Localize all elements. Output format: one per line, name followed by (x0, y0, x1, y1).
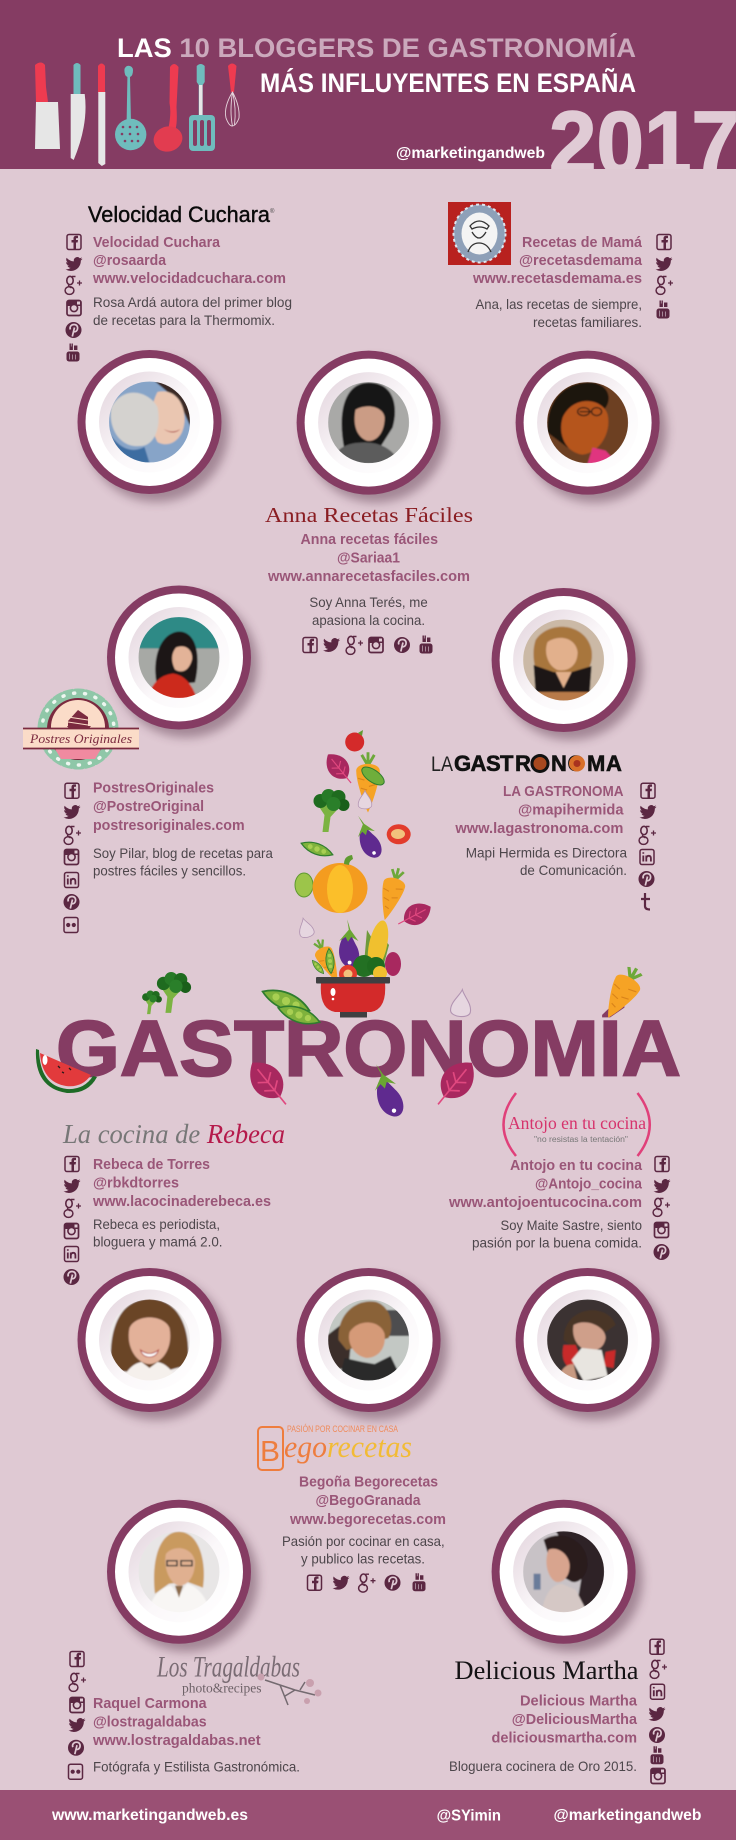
header banner (0, 0, 736, 169)
footer handle marketingandweb: @marketingandweb (554, 1807, 702, 1824)
watermelon (36, 1049, 97, 1093)
illustration: vegetables falling into bowl (295, 730, 436, 1018)
carrot (596, 962, 649, 1025)
social icons: Begoña Begorecetas (308, 1573, 426, 1592)
logo: Antojo en tu cocina: Antojo en tu cocina (508, 1113, 646, 1133)
plate portrait 6 (78, 1268, 228, 1420)
blogger: Postres Originales text: postres fáciles y sencillos. (93, 863, 246, 879)
blogger: Anna Recetas Fáciles text (267, 531, 470, 628)
footer bar (0, 1790, 736, 1840)
blogger: Antojo en tu cocina text: Antojo en tu cocina (510, 1157, 643, 1174)
logo: Anna Recetas Fáciles: Anna Recetas Fáciles (265, 503, 473, 527)
leaf (393, 898, 436, 933)
social icons: Postres Originales (64, 783, 81, 932)
logo: Los Tragaldabas: photo&recipes (182, 1682, 262, 1697)
blogger: Postres Originales text (93, 780, 273, 879)
pumpkin (295, 855, 368, 913)
logo: Begorecetas: egorecetas (284, 1429, 412, 1464)
pea pod (299, 838, 335, 860)
blogger: Velocidad Cuchara text: Velocidad Cuchara (93, 234, 221, 251)
blogger: Delicious Martha text: @DeliciousMartha (512, 1711, 638, 1728)
blogger: Begoña Begorecetas text (282, 1474, 446, 1567)
blogger: La Gastronoma text: @mapihermida (518, 802, 624, 819)
eggplant (367, 1060, 407, 1120)
social icons: Recetas de Mamá (656, 234, 673, 318)
bowl contents (309, 919, 401, 986)
plate portrait 1 (78, 350, 228, 502)
blogger: Anna Recetas Fáciles text: www.annarecetasfaciles.com (267, 568, 470, 585)
blogger: Anna Recetas Fáciles text: @Sariaa1 (337, 550, 400, 567)
blogger: Delicious Martha text: deliciousmartha.com (492, 1729, 637, 1746)
blogger: Recetas de Mamá text: @recetasdemama (519, 252, 643, 269)
blogger: Delicious Martha text: Delicious Martha (520, 1692, 638, 1709)
logo: Begorecetas: B (260, 1436, 280, 1468)
blogger: Rebeca de Torres text: @rbkdtorres (93, 1175, 179, 1192)
footer handle SYimin: @SYimin (437, 1808, 501, 1824)
plate portrait 7 (297, 1268, 448, 1420)
blogger: Raquel Carmona text: www.lostragaldabas.net (92, 1732, 261, 1749)
blogger: Recetas de Mamá text: www.recetasdemama.es (472, 270, 642, 287)
social icons: Delicious Martha (648, 1639, 667, 1784)
social icons: Antojo en tu cocina (653, 1156, 671, 1260)
blogger: Rebeca de Torres text: Rebeca es periodista, (93, 1216, 220, 1232)
logo: Antojo en tu cocina: "no resistas la tentación" (534, 1135, 628, 1144)
title: LAS 10 BLOGGERS DE GASTRONOMÍA (117, 32, 636, 63)
blogger: Velocidad Cuchara text: www.velocidadcuchara.com (92, 270, 286, 287)
logo: Antojo en tu cocina (504, 1093, 650, 1156)
blogger: Recetas de Mamá text: Recetas de Mamá (522, 234, 643, 251)
blogger: Postres Originales text: PostresOriginales (93, 780, 214, 797)
blogger: Delicious Martha text: Bloguera cocinera de Oro 2015. (449, 1758, 637, 1774)
logo: Recetas de Mamá (448, 202, 511, 265)
pea pods (260, 984, 322, 1029)
blogger: Postres Originales text: @PostreOriginal (93, 798, 204, 815)
eggplant (351, 812, 384, 861)
plate portrait 8 (516, 1268, 667, 1420)
footer website: www.marketingandweb.es (51, 1807, 248, 1824)
tomato (345, 730, 364, 752)
logo: Begorecetas: PASIÓN POR COCINAR EN CASA (287, 1424, 398, 1434)
plate portrait 5 (492, 588, 643, 740)
garlic (296, 916, 315, 939)
blogger: Velocidad Cuchara text: Rosa Ardá autora del primer blog (93, 294, 292, 310)
logo: Postres Originales: Postres Originales (29, 731, 132, 746)
social icons: Rebeca de Torres (64, 1156, 81, 1285)
blogger: Delicious Martha text (449, 1692, 638, 1774)
logo: La Gastronoma: GASTRONOMA (454, 751, 622, 776)
logo: Los Tragaldabas (156, 1651, 322, 1705)
blogger: Velocidad Cuchara text: de recetas para la Thermomix. (93, 312, 275, 328)
blogger: Anna Recetas Fáciles text: Soy Anna Terés, me (309, 594, 428, 610)
logo: Postres Originales (23, 691, 139, 767)
blogger: La Gastronoma text (454, 783, 627, 878)
logo: Begorecetas (258, 1424, 412, 1470)
blogger: Antojo en tu cocina text (448, 1157, 643, 1251)
blogger: Begoña Begorecetas text: www.begorecetas.com (289, 1511, 446, 1528)
logo: Velocidad Cuchara: ® (270, 208, 275, 215)
blogger: La Gastronoma text: www.lagastronoma.com (454, 820, 623, 837)
carrot with cucumber (356, 752, 387, 812)
blogger: Raquel Carmona text: Fotógrafa y Estilista Gastronómica. (93, 1759, 300, 1775)
blogger: Raquel Carmona text: @lostragaldabas (93, 1714, 207, 1731)
blogger: Raquel Carmona text: Raquel Carmona (93, 1695, 207, 1712)
blogger: Raquel Carmona text (92, 1695, 300, 1775)
blogger: Recetas de Mamá text: Ana, las recetas de siempre, (476, 296, 642, 312)
illustration: scattered vegetables around title (36, 962, 649, 1120)
plate portrait 4 (107, 586, 258, 738)
garlic (450, 989, 472, 1017)
plate portrait 2 (297, 351, 448, 503)
blogger: Begoña Begorecetas text: @BegoGranada (316, 1492, 421, 1509)
blogger: Postres Originales text: Soy Pilar, blog de recetas para (93, 845, 273, 861)
blogger: Antojo en tu cocina text: pasión por la buena comida. (472, 1235, 642, 1251)
blogger: Recetas de Mamá text: recetas familiares. (533, 314, 642, 330)
broccoli (314, 789, 350, 832)
blogger: Postres Originales text: postresoriginales.com (93, 817, 245, 834)
broccoli (142, 972, 191, 1014)
blogger: Rebeca de Torres text (92, 1156, 271, 1250)
social icons: La Gastronoma (638, 783, 657, 910)
leaf (241, 1053, 298, 1114)
social icons: Velocidad Cuchara (65, 234, 83, 362)
blogger: Antojo en tu cocina text: Soy Maite Sastre, siento (500, 1217, 642, 1233)
blogger: Rebeca de Torres text: Rebeca de Torres (93, 1156, 210, 1173)
red bowl (316, 977, 390, 1018)
blogger: Anna Recetas Fáciles text: Anna recetas fáciles (300, 531, 438, 548)
plate portrait 10 (492, 1500, 643, 1652)
blogger: Rebeca de Torres text: bloguera y mamá 2.0. (93, 1234, 222, 1250)
plate portrait 9 (107, 1500, 258, 1652)
big word GASTRONOMÍA: GASTRONOMÍA (56, 1004, 681, 1093)
logo: Los Tragaldabas: Los Tragaldabas (156, 1651, 300, 1684)
leaf (320, 748, 359, 789)
blogger: Rebeca de Torres text: www.lacocinaderebeca.es (92, 1193, 271, 1210)
logo: La Gastronoma: LA (431, 753, 453, 776)
leaf (426, 1053, 483, 1114)
blogger: Begoña Begorecetas text: Begoña Begorecetas (299, 1474, 438, 1491)
blogger: La Gastronoma text: LA GASTRONOMA (503, 783, 624, 800)
title: MÁS INFLUYENTES EN ESPAÑA (260, 67, 636, 98)
title (117, 32, 636, 98)
blogger: Begoña Begorecetas text: y publico las recetas. (301, 1551, 425, 1567)
blogger: La Gastronoma text: de Comunicación. (520, 862, 627, 878)
blogger: Velocidad Cuchara text: @rosaarda (93, 252, 167, 269)
social icons: Anna Recetas Fáciles (303, 636, 432, 654)
blogger: Velocidad Cuchara text (92, 234, 292, 328)
logo: Velocidad Cuchara: Velocidad Cuchara (88, 202, 271, 227)
carrot (374, 865, 409, 923)
header handle: @marketingandweb (396, 145, 545, 162)
blogger: La Gastronoma text: Mapi Hermida es Directora (466, 845, 627, 861)
blogger: Antojo en tu cocina text: @Antojo_cocina (535, 1176, 643, 1193)
blogger: Begoña Begorecetas text: Pasión por cocinar en casa, (282, 1533, 445, 1549)
social icons: Raquel Carmona (68, 1652, 86, 1779)
blogger: Anna Recetas Fáciles text: apasiona la cocina. (312, 612, 425, 628)
logo: Delicious Martha: Delicious Martha (454, 1656, 639, 1685)
blogger: Antojo en tu cocina text: www.antojoentucocina.com (448, 1194, 642, 1211)
plate portrait 3 (516, 351, 667, 503)
tomato slice (387, 824, 411, 844)
logo: La cocina de Rebeca: La cocina de Rebeca (62, 1119, 285, 1149)
icon: kitchen utensils (35, 62, 239, 166)
blogger: Recetas de Mamá text (472, 234, 643, 330)
